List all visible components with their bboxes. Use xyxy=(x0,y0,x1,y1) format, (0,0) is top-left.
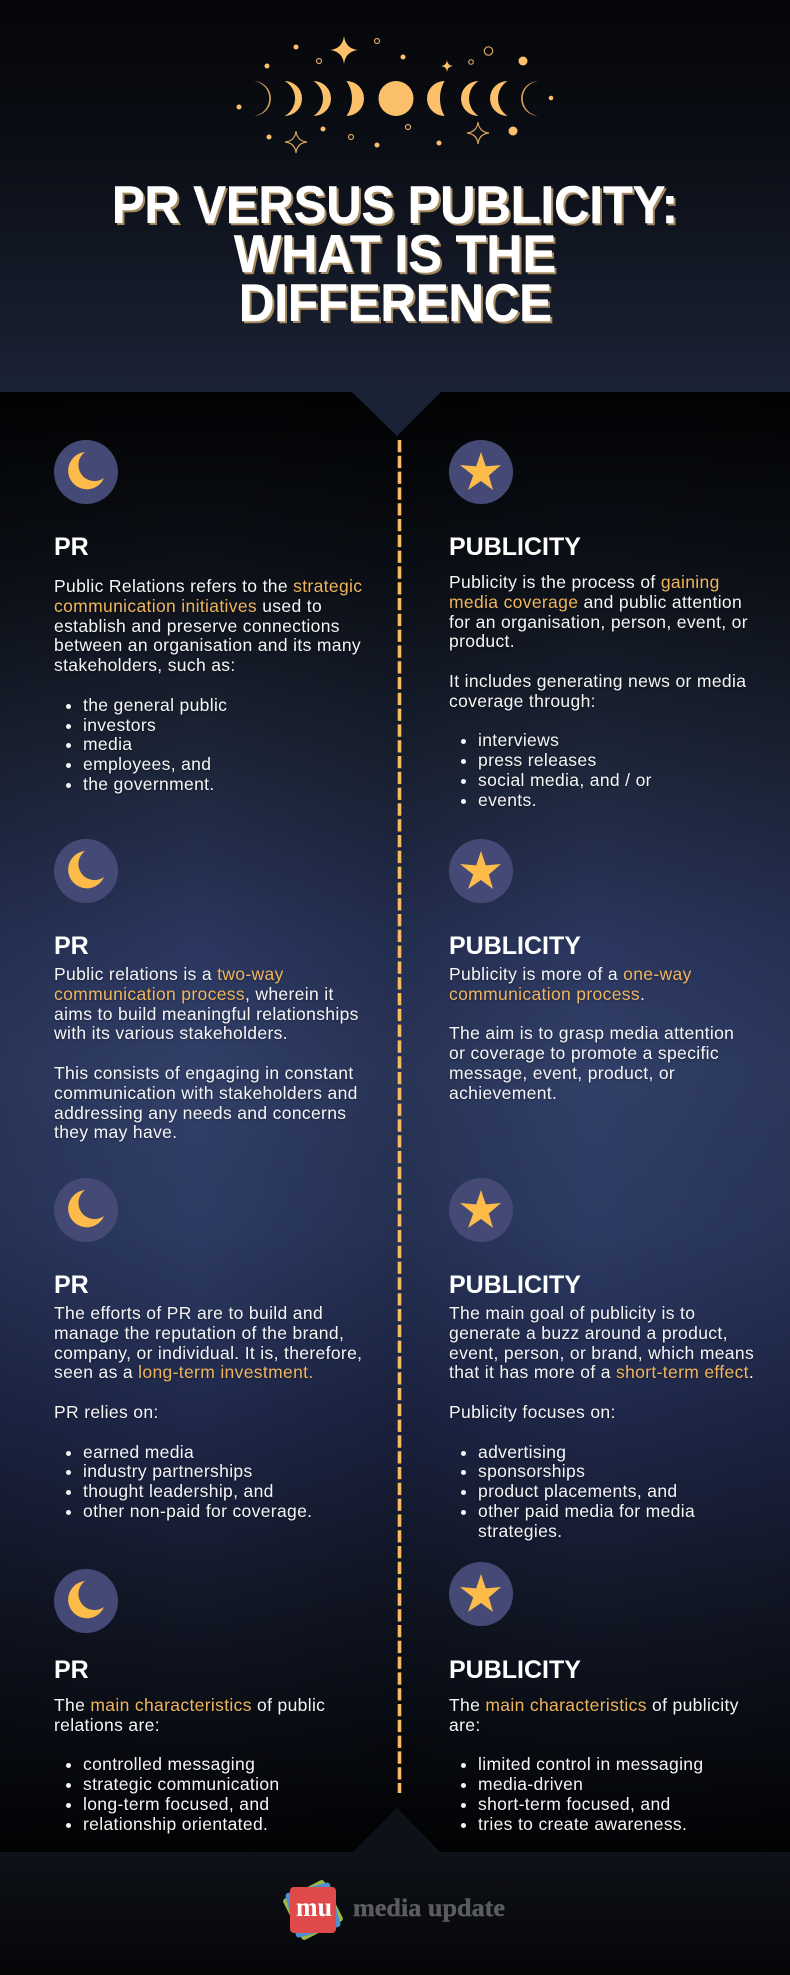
icon: moon, section 4 xyxy=(54,1569,118,1633)
text: PR, section 3 xyxy=(54,1303,362,1521)
text: PR, section 2: communication with stakeholders and xyxy=(54,1083,358,1103)
text: publicity, section 1: Publicity is the process of gaining xyxy=(449,572,720,592)
text: PR, section 3: The efforts of PR are to build and xyxy=(54,1303,323,1323)
title: DIFFERENCE xyxy=(239,274,552,333)
text: publicity, section 2: message, event, product, or xyxy=(449,1063,675,1083)
title xyxy=(112,176,678,333)
text: publicity, section 1: product. xyxy=(449,631,515,651)
text: publicity, section 3: product placements, and xyxy=(478,1481,677,1501)
logo: media update xyxy=(283,1880,505,1940)
text: PR, section 1: between an organisation and its many xyxy=(54,635,361,655)
text: publicity, section 2: Publicity is more of a one-way xyxy=(449,964,692,984)
text: PR, section 2: Public relations is a two-way xyxy=(54,964,284,984)
text: PR, section 1: the government. xyxy=(83,774,215,794)
text: PR, section 4: long-term focused, and xyxy=(83,1794,269,1814)
icon: star, section 2 xyxy=(449,839,513,903)
text: PR, section 3: PR relies on: xyxy=(54,1402,159,1422)
text: publicity, section 4: are: xyxy=(449,1715,481,1735)
footer pointer triangle xyxy=(353,1808,440,1852)
text: PR, section 4: relationship orientated. xyxy=(83,1814,268,1834)
text: PR, section 4: relations are: xyxy=(54,1715,160,1735)
text: PR, section 3: manage the reputation of the brand, xyxy=(54,1323,344,1343)
logo: media update: mu xyxy=(296,1892,332,1922)
text: publicity, section 4: media-driven xyxy=(478,1774,583,1794)
header panel xyxy=(0,0,790,392)
text: publicity, section 3: strategies. xyxy=(478,1521,562,1541)
heading: PR, section 2: PR xyxy=(54,932,89,960)
text: PR, section 4 xyxy=(54,1695,325,1834)
text: publicity, section 1: It includes generating news or media xyxy=(449,671,746,691)
text: publicity, section 4: tries to create awareness. xyxy=(478,1814,687,1834)
icon: star, section 1 xyxy=(449,440,513,504)
text: PR, section 2: with its various stakeholders. xyxy=(54,1023,288,1043)
icon: moon, section 1 xyxy=(54,440,118,504)
heading: PR, section 4: PR xyxy=(54,1656,89,1684)
text: PR, section 1: employees, and xyxy=(83,754,211,774)
text: publicity, section 2: The aim is to grasp media attention xyxy=(449,1023,734,1043)
footer panel xyxy=(0,1852,790,1975)
text: publicity, section 1: social media, and / or xyxy=(478,770,652,790)
text: PR, section 1: the general public xyxy=(83,695,227,715)
text: PR, section 1: stakeholders, such as: xyxy=(54,655,236,675)
text: PR, section 3: company, or individual. It is, therefore, xyxy=(54,1343,362,1363)
heading: publicity, section 2: PUBLICITY xyxy=(449,932,581,960)
text: publicity, section 4: short-term focused, and xyxy=(478,1794,671,1814)
text: PR, section 1: media xyxy=(83,734,132,754)
heading: PR, section 3: PR xyxy=(54,1271,89,1299)
heading: publicity, section 1: PUBLICITY xyxy=(449,533,581,561)
text: PR, section 3: other non-paid for coverage. xyxy=(83,1501,312,1521)
text: publicity, section 3: other paid media for media xyxy=(478,1501,695,1521)
text: PR, section 1: investors xyxy=(83,715,156,735)
text: publicity, section 4 xyxy=(449,1695,739,1834)
icon: star, section 4 xyxy=(449,1562,513,1626)
heading: publicity, section 3: PUBLICITY xyxy=(449,1271,581,1299)
text: PR, section 1 xyxy=(54,576,362,794)
text: PR, section 2: communication process, wherein it xyxy=(54,984,334,1004)
text: PR, section 3: thought leadership, and xyxy=(83,1481,274,1501)
text: PR, section 3: industry partnerships xyxy=(83,1461,253,1481)
title: WHAT IS THE xyxy=(234,225,556,284)
text: PR, section 1: establish and preserve connections xyxy=(54,616,340,636)
text: publicity, section 3: that it has more of a short-term effect. xyxy=(449,1362,754,1382)
text: publicity, section 1: coverage through: xyxy=(449,691,596,711)
header pointer triangle xyxy=(352,392,441,436)
text: PR, section 1: communication initiatives used to xyxy=(54,596,322,616)
text: publicity, section 1 xyxy=(449,572,748,810)
text: publicity, section 4: The main characteristics of publicity xyxy=(449,1695,739,1715)
text: publicity, section 3: advertising xyxy=(478,1442,566,1462)
icon: moon, section 2 xyxy=(54,839,118,903)
icon: star, section 3 xyxy=(449,1178,513,1242)
moon phases illustration xyxy=(236,36,554,153)
text: publicity, section 2: achievement. xyxy=(449,1083,557,1103)
text: publicity, section 4: limited control in messaging xyxy=(478,1754,703,1774)
text: publicity, section 2: communication process. xyxy=(449,984,645,1004)
text: publicity, section 1: for an organisation, person, event, or xyxy=(449,612,748,632)
text: publicity, section 3: Publicity focuses on: xyxy=(449,1402,616,1422)
text: publicity, section 1: interviews xyxy=(478,730,559,750)
text: PR, section 3: seen as a long-term investment. xyxy=(54,1362,314,1382)
text: PR, section 4: strategic communication xyxy=(83,1774,280,1794)
text: publicity, section 3: event, person, or brand, which means xyxy=(449,1343,754,1363)
text: publicity, section 3 xyxy=(449,1303,754,1541)
text: PR, section 2: addressing any needs and concerns xyxy=(54,1103,346,1123)
text: publicity, section 3: The main goal of publicity is to xyxy=(449,1303,695,1323)
text: publicity, section 2 xyxy=(449,964,734,1103)
text: publicity, section 3: sponsorships xyxy=(478,1461,585,1481)
text: PR, section 2: aims to build meaningful relationships xyxy=(54,1004,359,1024)
text: PR, section 4: controlled messaging xyxy=(83,1754,255,1774)
text: PR, section 4: The main characteristics of public xyxy=(54,1695,325,1715)
heading: PR, section 1: PR xyxy=(54,533,89,561)
heading: publicity, section 4: PUBLICITY xyxy=(449,1656,581,1684)
dashed centre divider xyxy=(398,440,402,1793)
main panel xyxy=(0,392,790,1852)
text: PR, section 2 xyxy=(54,964,359,1143)
text: PR, section 2: This consists of engaging in constant xyxy=(54,1063,354,1083)
text: publicity, section 1: media coverage and public attention xyxy=(449,592,742,612)
icon: moon, section 3 xyxy=(54,1178,118,1242)
logo: media update: media update xyxy=(353,1895,505,1922)
text: publicity, section 1: press releases xyxy=(478,750,597,770)
text: PR, section 2: they may have. xyxy=(54,1122,177,1142)
text: PR, section 1: Public Relations refers to the strategic xyxy=(54,576,362,596)
title: PR VERSUS PUBLICITY: xyxy=(112,176,678,235)
text: PR, section 3: earned media xyxy=(83,1442,194,1462)
text: publicity, section 2: or coverage to promote a specific xyxy=(449,1043,719,1063)
text: publicity, section 1: events. xyxy=(478,790,537,810)
text: publicity, section 3: generate a buzz around a product, xyxy=(449,1323,728,1343)
